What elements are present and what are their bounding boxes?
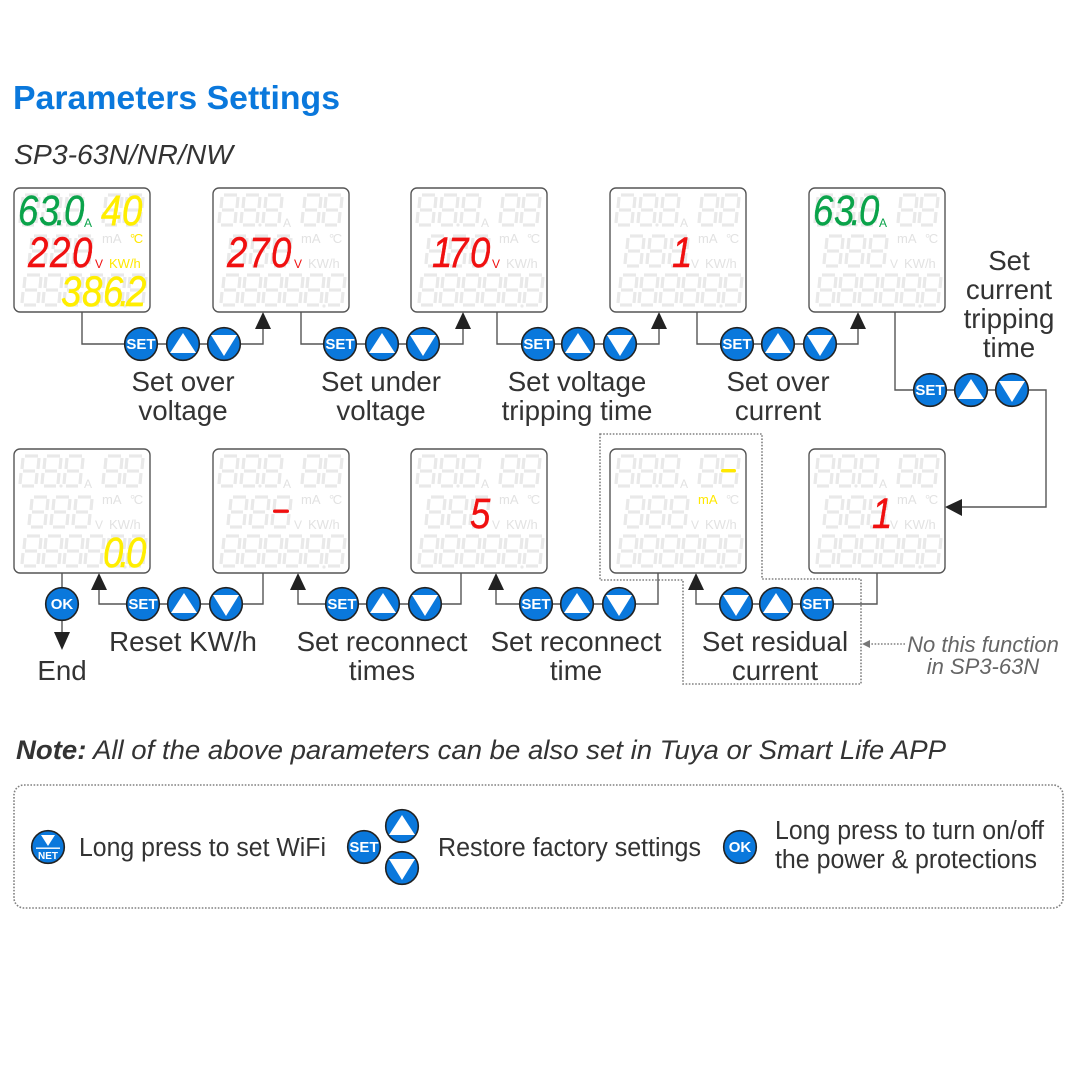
label: set reconnect time: time <box>550 655 602 686</box>
panel: start display: KW/h <box>109 256 141 271</box>
panel: start display: mA <box>102 231 122 246</box>
panel: reconnect times display <box>213 449 349 573</box>
panel: over current display: °C <box>925 231 938 246</box>
dotted frame: residual current step <box>600 434 861 684</box>
label: set voltage tripping time: tripping time <box>502 395 652 426</box>
panel: voltage tripping time display: KW/h <box>705 256 737 271</box>
icon: OK button: OK <box>729 839 751 856</box>
panel: over voltage display: A <box>283 216 291 230</box>
button group: reconnect time <box>520 588 635 620</box>
button group: over voltage <box>125 328 240 360</box>
text: power and protections: the power & protections <box>775 846 1037 874</box>
panel: under voltage display: °C <box>527 231 540 246</box>
arrow: callout pointer to residual current <box>862 640 905 648</box>
button group: reconnect time: SET <box>521 596 551 613</box>
panel: over current display: KW/h <box>904 256 936 271</box>
panel: reconnect times display: KW/h <box>308 517 340 532</box>
icon: NET button: NET <box>38 851 58 862</box>
label: set over current: Set over <box>726 366 830 397</box>
label: set reconnect times: Set reconnect <box>297 626 467 657</box>
panel: under voltage display: V <box>492 257 500 271</box>
label: set under voltage: voltage <box>336 395 426 426</box>
panel: start display: V <box>95 257 103 271</box>
label: set voltage tripping time: Set voltage <box>508 366 646 397</box>
label: set under voltage: Set under <box>321 366 441 397</box>
text: restore factory settings: Restore factory settings <box>438 834 701 862</box>
panel: under voltage display: mA <box>499 231 519 246</box>
panel: reconnect time display: °C <box>527 492 540 507</box>
panel: residual current display: KW/h <box>705 517 737 532</box>
label: set residual current: current <box>732 655 818 686</box>
panel: reconnect time display: mA <box>499 492 519 507</box>
label: reset KW/h: Reset KW/h <box>109 626 257 657</box>
panel: over current display <box>809 187 945 312</box>
button group: current tripping time: SET <box>915 382 945 399</box>
panel: voltage tripping time display: V <box>691 257 699 271</box>
button group: residual current <box>720 588 833 620</box>
label: end: End <box>37 655 87 686</box>
panel: current tripping time display: °C <box>925 492 938 507</box>
panel: current tripping time display: V <box>890 518 898 532</box>
panel: residual current display: mA <box>698 492 718 507</box>
panel: start display: 40 <box>101 187 142 235</box>
panel: reconnect time display <box>411 449 547 573</box>
panel: reconnect times display: V <box>294 518 302 532</box>
label: set residual current: Set residual <box>702 626 848 657</box>
panel: current tripping time display: KW/h <box>904 517 936 532</box>
panel: start display: 220 <box>27 229 92 277</box>
panel: button legend <box>14 785 1063 908</box>
icon: OK button: OK <box>51 596 73 613</box>
panel: over voltage display: °C <box>329 231 342 246</box>
panel: under voltage display: KW/h <box>506 256 538 271</box>
panel: reconnect time display: A <box>481 477 489 491</box>
panel: over current display: mA <box>897 231 917 246</box>
button group: over voltage: SET <box>126 336 156 353</box>
subtitle: model names: SP3-63N/NR/NW <box>14 139 236 170</box>
button group: reconnect times: SET <box>327 596 357 613</box>
panel: reconnect times display: mA <box>301 492 321 507</box>
icon: SET, up and down buttons: SET <box>349 839 379 856</box>
panel: over voltage display <box>213 188 349 312</box>
panel: residual current display: V <box>691 518 699 532</box>
panel: residual current display <box>610 449 746 573</box>
panel: over voltage display: V <box>294 257 302 271</box>
arrowheads <box>54 312 962 650</box>
label: set over current: current <box>735 395 821 426</box>
panel: reset energy display: V <box>95 518 103 532</box>
panel: reconnect time display: 5 <box>470 490 491 538</box>
panel: over voltage display: mA <box>301 231 321 246</box>
panel: under voltage display <box>411 188 547 312</box>
panel: start display: A <box>84 216 92 230</box>
button group: reset energy <box>127 588 242 620</box>
label: set over voltage: voltage <box>138 395 228 426</box>
panel: reconnect time display: V <box>492 518 500 532</box>
label: set current tripping time: tripping <box>964 303 1054 334</box>
title: Parameters Settings <box>13 79 340 116</box>
text: set WiFi: Long press to set WiFi <box>79 834 326 862</box>
panel: start display: 63.0 <box>18 187 84 235</box>
label: set reconnect times: times <box>349 655 415 686</box>
panel: under voltage display: 170 <box>432 229 490 277</box>
panel: over current display: V <box>890 257 898 271</box>
panel: reconnect time display: KW/h <box>506 517 538 532</box>
label: set current tripping time: Set <box>988 245 1030 276</box>
panel: reconnect times display: °C <box>329 492 342 507</box>
panel: voltage tripping time display <box>610 188 746 312</box>
icon: SET, up and down buttons <box>348 810 418 884</box>
panel: current tripping time display: 1 <box>872 490 892 538</box>
button group: reconnect times <box>326 588 441 620</box>
panel: over voltage display: 270 <box>226 229 291 277</box>
panel: residual current display: °C <box>726 492 739 507</box>
panel: start display <box>14 187 150 316</box>
panel: under voltage display: A <box>481 216 489 230</box>
panel: reset energy display <box>14 449 150 577</box>
panel: current tripping time display: A <box>879 477 887 491</box>
panel: over current display: A <box>879 216 887 230</box>
panel: reconnect times display: A <box>283 477 291 491</box>
panel: current tripping time display: mA <box>897 492 917 507</box>
callout: no function in SP3-63N: No this function <box>907 632 1059 657</box>
callout: no function in SP3-63N: in SP3-63N <box>927 654 1039 679</box>
panel: reset energy display: °C <box>130 492 143 507</box>
panel: reset energy display: A <box>84 477 92 491</box>
button group: current tripping time <box>914 374 1028 406</box>
button group: residual current: SET <box>802 596 832 613</box>
button group: under voltage <box>324 328 439 360</box>
panel: reset energy display: mA <box>102 492 122 507</box>
panel: start display: 386.2 <box>61 268 146 316</box>
icon: OK button <box>46 588 78 620</box>
label: set current tripping time: current <box>966 274 1052 305</box>
panel: voltage tripping time display: 1 <box>672 229 692 277</box>
button group: voltage tripping time: SET <box>523 336 553 353</box>
panel: voltage tripping time display: mA <box>698 231 718 246</box>
icon: NET button <box>32 831 64 863</box>
panel: reset energy display: KW/h <box>109 517 141 532</box>
panel: reset energy display: 0.0 <box>103 529 146 577</box>
connector lines <box>62 312 1046 632</box>
text: power and protections <box>775 817 1045 874</box>
panel: over voltage display: KW/h <box>308 256 340 271</box>
label: set over voltage: Set over <box>131 366 235 397</box>
icon: OK button <box>724 831 756 863</box>
button group: over current <box>721 328 836 360</box>
panel: start display: °C <box>130 231 143 246</box>
panel: residual current display: A <box>680 477 688 491</box>
panel: voltage tripping time display: A <box>680 216 688 230</box>
label: set current tripping time: time <box>983 332 1035 363</box>
note: Note: All of the above parameters can be also set in Tuya or Smart Life APP <box>16 735 946 765</box>
button group: over current: SET <box>722 336 752 353</box>
text: power and protections: Long press to turn on/off <box>775 817 1045 845</box>
label: set reconnect time: Set reconnect <box>491 626 661 657</box>
button group: under voltage: SET <box>325 336 355 353</box>
panel: current tripping time display <box>809 449 945 573</box>
button group: reset energy: SET <box>128 596 158 613</box>
panel: voltage tripping time display: °C <box>726 231 739 246</box>
panel: over current display: 63.0 <box>813 187 879 235</box>
button group: voltage tripping time <box>522 328 636 360</box>
